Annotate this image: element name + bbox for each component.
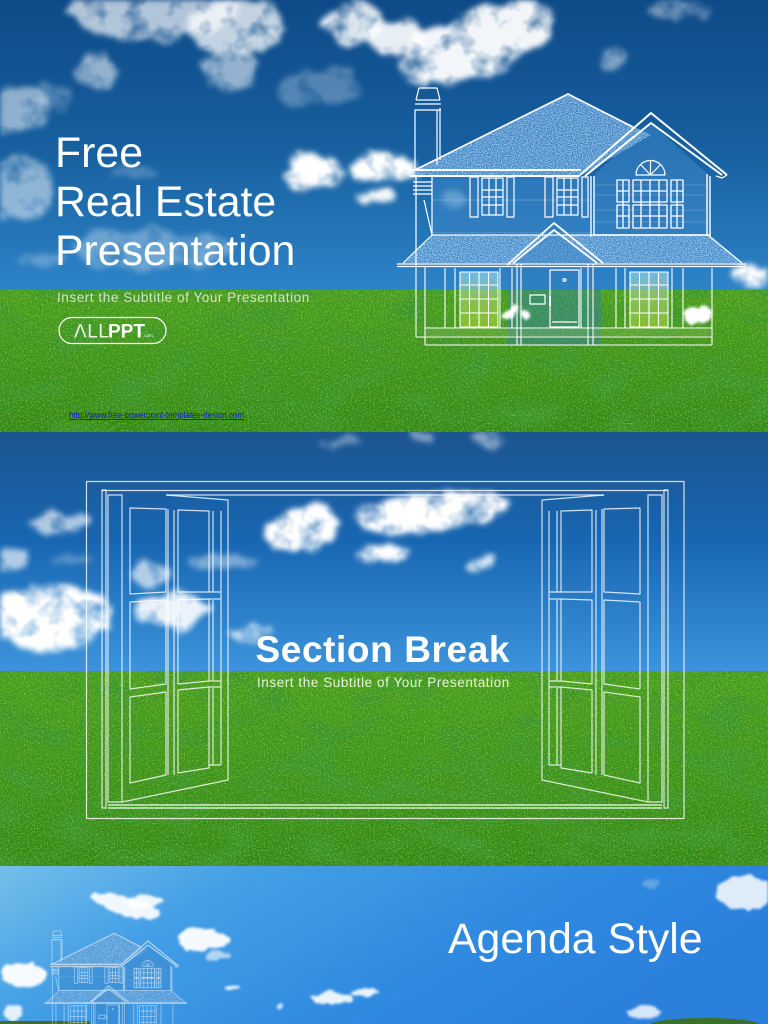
subtitle: Insert the Subtitle of Your Presentation xyxy=(57,290,310,305)
hyperlink: http://www.free-powerpoint-templates-design.com xyxy=(69,410,244,420)
panel: title slide xyxy=(0,0,768,432)
sky background xyxy=(0,432,768,673)
section subtitle: Insert the Subtitle of Your Presentation xyxy=(257,675,510,690)
house blueprint illustration xyxy=(397,88,746,345)
sky background xyxy=(0,866,768,1024)
logo: ALLPPT: ΛLL xyxy=(74,322,109,342)
logo: ALLPPT: .com xyxy=(143,333,153,338)
right window door xyxy=(542,490,668,808)
grass field xyxy=(0,671,768,866)
left window door xyxy=(102,490,228,808)
title: Free xyxy=(55,129,143,177)
clouds xyxy=(0,433,506,648)
clouds xyxy=(1,877,768,1021)
icon: white flowers xyxy=(503,303,712,323)
sky background xyxy=(0,0,768,292)
lower window glow xyxy=(460,272,668,327)
clouds xyxy=(0,0,768,286)
window blueprint frame xyxy=(86,482,684,818)
title: Presentation xyxy=(55,227,295,275)
section heading: Section Break xyxy=(256,629,510,670)
grass field xyxy=(0,290,768,432)
panel: agenda slide xyxy=(0,866,768,1024)
logo: ALLPPT: PPT xyxy=(108,322,145,342)
grass and tree line xyxy=(0,1018,760,1024)
agenda heading: Agenda Style xyxy=(448,915,703,963)
small house illustration xyxy=(45,931,187,1024)
logo: ALLPPT xyxy=(59,318,166,344)
title xyxy=(55,129,295,275)
panel: section break slide xyxy=(0,432,768,866)
title: Real Estate xyxy=(55,178,276,226)
